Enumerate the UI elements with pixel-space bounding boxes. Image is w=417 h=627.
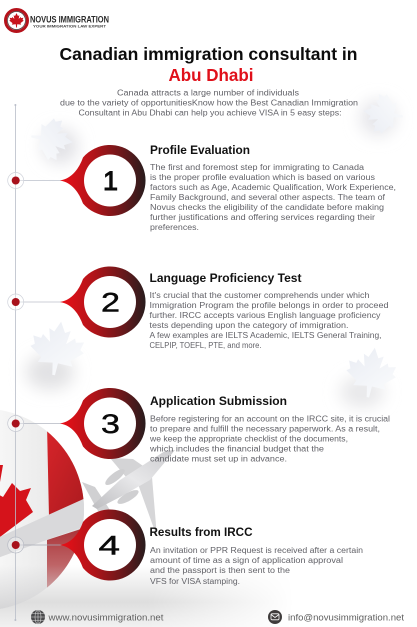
step 3 body bbox=[149, 414, 390, 464]
step 2 body: further. IRCC accepts various English language proficiency bbox=[150, 311, 380, 320]
logo bbox=[6, 10, 109, 32]
step 1 timeline marker bbox=[8, 172, 62, 188]
step 2 body: CELPIP, TOEFL, PTE, and more. bbox=[150, 341, 262, 350]
plane: engines bbox=[103, 466, 140, 506]
step 3 number badge bbox=[60, 388, 146, 459]
flag: tilted white band bbox=[0, 499, 84, 557]
maple leaf: middle right bbox=[340, 344, 400, 408]
logo wordmark: NOVUS IMMIGRATION bbox=[30, 14, 109, 26]
step 1 body: preferences. bbox=[150, 223, 199, 232]
step 1 body: is the proper profile evaluation which is based on various bbox=[150, 173, 375, 182]
step 3 body: candidate must set up in advance. bbox=[150, 454, 287, 464]
footer: email bbox=[268, 610, 404, 624]
step 4 number badge: 4 bbox=[98, 530, 120, 560]
step 2 heading: Language Proficiency Test bbox=[150, 271, 302, 285]
globe with Canadian flag bbox=[0, 410, 84, 609]
step 2 bbox=[8, 266, 388, 350]
step 1 body: Novus checks the eligibility of the candidate before making bbox=[150, 203, 384, 212]
step 1 bbox=[8, 143, 396, 232]
step 2 body bbox=[150, 291, 388, 350]
flag: lower red band bbox=[47, 529, 80, 588]
step 4 bbox=[8, 510, 363, 586]
intro paragraph: Canada attracts a large number of individuals bbox=[117, 88, 299, 98]
step 4 body: amount of time as a sign of application approval bbox=[150, 556, 343, 565]
floor shadow bbox=[0, 574, 256, 627]
step 1 number badge: 1 bbox=[103, 166, 118, 196]
plane: tail fin bbox=[82, 482, 110, 511]
logo emblem bbox=[6, 10, 28, 32]
intro paragraph: due to the variety of opportunitiesKnow how the Best Canadian Immigration bbox=[60, 98, 358, 108]
globe lower shade bbox=[0, 570, 62, 609]
flag: leaf tip bbox=[0, 465, 3, 482]
title: Abu Dhabi bbox=[168, 65, 254, 85]
step 2 body: A few examples are IELTS Academic, IELTS General Training, bbox=[150, 331, 382, 340]
icon: mail bbox=[268, 610, 282, 624]
step 1 body: The first and foremost step for immigrating to Canada bbox=[150, 163, 365, 172]
title: Canadian immigration consultant in bbox=[60, 44, 358, 64]
step 2 body: Immigration Program the profile belongs in order to proceed bbox=[150, 301, 388, 310]
step 1 body: further justifications and offering services regarding their bbox=[150, 213, 375, 222]
flag: upper red band bbox=[47, 431, 84, 514]
maple leaf: middle left bbox=[26, 318, 88, 390]
intro paragraph bbox=[60, 88, 358, 118]
step 2 body: It's crucial that the customer comprehends under which bbox=[150, 291, 370, 300]
step 1 body: Family Background, and several other aspects. The team of bbox=[150, 193, 386, 202]
plane: fuselage bbox=[92, 450, 175, 509]
flag: maple leaf bbox=[0, 483, 33, 537]
step 1 body: factors such as Age, Academic Qualification, Work Experience, bbox=[150, 183, 396, 192]
step 4 body: An invitation or PPR Request is received after a certain bbox=[150, 546, 363, 555]
step 3 bbox=[8, 388, 390, 464]
step 3 heading: Application Submission bbox=[150, 394, 287, 408]
footer: website bbox=[31, 610, 164, 624]
icon: globe bbox=[31, 610, 45, 624]
maple leaf: top left bbox=[28, 116, 78, 164]
step 2 body: tests depending upon the category of immigration. bbox=[150, 321, 348, 330]
step 1 body bbox=[150, 163, 396, 232]
step 1 number badge bbox=[60, 145, 146, 216]
step 3 body: we keep the appropriate checklist of the documents, bbox=[149, 434, 348, 444]
footer: email: info@novusimmigration.net bbox=[288, 612, 404, 624]
step 3 timeline marker bbox=[8, 416, 62, 432]
airplane bbox=[82, 450, 175, 537]
plane: upper wing bbox=[110, 458, 149, 483]
timeline vertical line bbox=[14, 104, 16, 621]
logo tagline: YOUR IMMIGRATION LAW EXPERT bbox=[33, 24, 106, 28]
step 3 body: to prepare and fulfill the necessary paperwork. As a result, bbox=[150, 424, 380, 434]
step 4 body: and the passport is then sent to the bbox=[150, 566, 291, 575]
step 3 number badge: 3 bbox=[101, 409, 120, 439]
step 4 number badge bbox=[60, 510, 146, 580]
footer: website: www.novusimmigration.net bbox=[47, 612, 164, 624]
plane: lower wing bbox=[138, 477, 157, 537]
step 2 timeline marker bbox=[8, 294, 62, 310]
title bbox=[60, 44, 358, 85]
step 2 number badge bbox=[60, 266, 146, 338]
step 4 timeline marker bbox=[8, 537, 62, 553]
step 4 body: VFS for VISA stamping. bbox=[150, 577, 240, 586]
step 4 body bbox=[150, 546, 363, 586]
intro paragraph: Consultant in Abu Dhabi can help you achieve VISA in 5 easy steps: bbox=[78, 108, 342, 118]
step 4 heading: Results from IRCC bbox=[150, 525, 253, 539]
maple leaf: top right bbox=[360, 91, 406, 136]
step 1 heading: Profile Evaluation bbox=[150, 143, 250, 157]
step 3 body: Before registering for an account on the IRCC site, it is crucial bbox=[150, 414, 390, 424]
step 3 body: which includes the financial budget that the bbox=[149, 444, 325, 454]
step 2 number badge: 2 bbox=[101, 288, 120, 318]
